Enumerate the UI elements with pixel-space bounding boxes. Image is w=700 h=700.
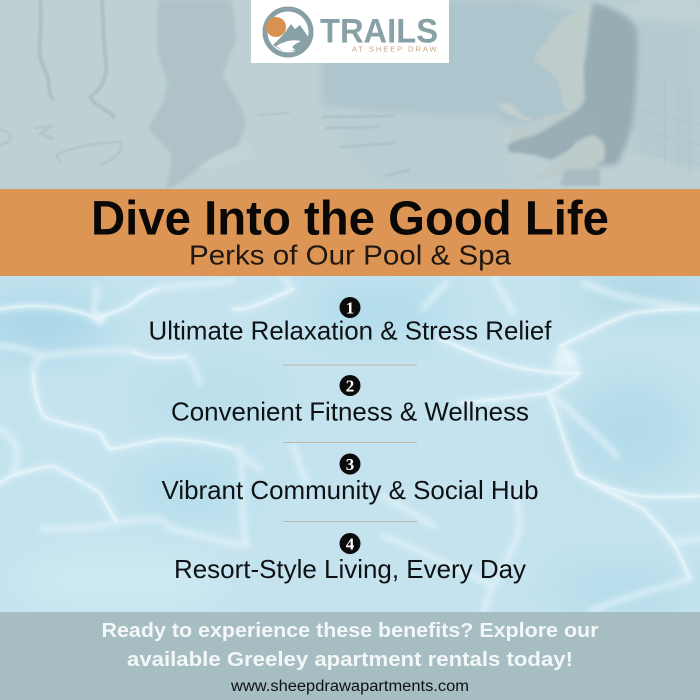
tiled pool wall (322, 0, 700, 189)
icon: mountain and sun emblem (265, 9, 311, 55)
panel: hazy pool photo (0, 0, 700, 189)
heading: subtitle: Perks of Our Pool & Spa (189, 240, 511, 270)
panel: footer call to action (0, 612, 700, 700)
list item 3: 3 (346, 455, 354, 474)
list item 1 (148, 297, 552, 346)
list item 2: Convenient Fitness & Wellness (171, 396, 529, 426)
wordmark: at sheep draw: AT SHEEP DRAW (352, 44, 438, 54)
call to action text: Ready to experience these benefits? Explore our (102, 620, 599, 642)
list item 4 (174, 533, 526, 584)
call to action text (102, 620, 599, 671)
water reflections on left (0, 0, 290, 189)
list item 1: 1 (346, 298, 354, 318)
panel: orange title band (0, 189, 700, 276)
list item 3: Vibrant Community & Social Hub (162, 475, 538, 505)
website url: www.sheepdrawapartments.com (230, 678, 469, 695)
wordmark: TRAILS: TRAILS (320, 12, 438, 50)
list item 1: Ultimate Relaxation & Stress Relief (148, 316, 552, 346)
soft glow of caustics (0, 276, 700, 612)
list item 4: Resort-Style Living, Every Day (174, 554, 526, 584)
list item 3 (162, 454, 538, 505)
woman reclining in water (498, 3, 637, 186)
call to action text: available Greeley apartment rentals today! (127, 649, 573, 671)
list item 2 (171, 375, 529, 426)
water caustics background (0, 265, 700, 615)
list item 2: 2 (346, 376, 354, 396)
panel: pool water list (0, 265, 700, 615)
heading: main title: Dive Into the Good Life (91, 192, 609, 246)
list item 4: 4 (346, 534, 355, 554)
panel: logo card (251, 0, 449, 63)
